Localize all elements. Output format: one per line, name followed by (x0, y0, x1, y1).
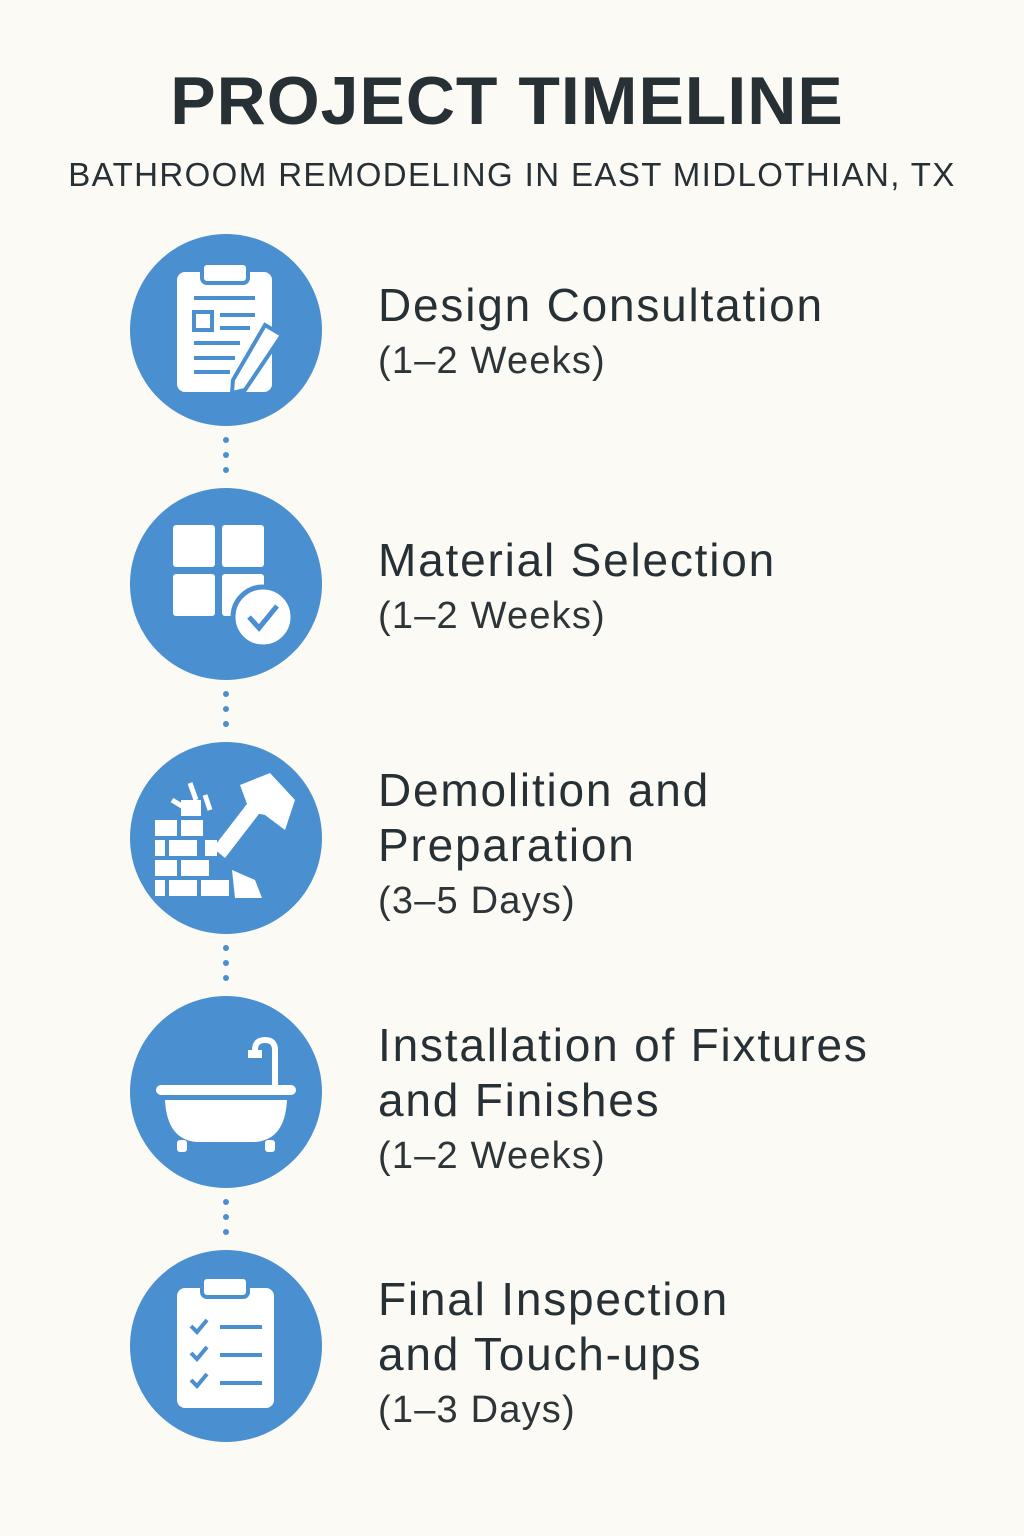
step 5 text (378, 1273, 729, 1431)
icon: checklist (130, 1250, 322, 1442)
step 2 text (378, 534, 776, 637)
icon: bathtub (130, 996, 322, 1188)
connectors (223, 437, 229, 1235)
step 4 text: Installation of Fixtures (378, 1019, 869, 1071)
icon: hammer and bricks (130, 742, 322, 934)
title: PROJECT TIMELINE (170, 63, 844, 139)
step 5 text: and Touch-ups (378, 1328, 702, 1380)
icon: clipboard with pencil (130, 234, 322, 426)
step 2 text: Material Selection (378, 534, 776, 586)
step 4 text: and Finishes (378, 1074, 660, 1126)
step 3 text: (3–5 Days) (378, 880, 576, 922)
subtitle: BATHROOM REMODELING IN EAST MIDLOTHIAN, TX (68, 156, 956, 193)
icon: tiles with check (130, 488, 322, 680)
step 1 text: (1–2 Weeks) (378, 340, 606, 382)
step 3 text (378, 764, 710, 922)
step 5 text: Final Inspection (378, 1273, 729, 1325)
step 2 text: (1–2 Weeks) (378, 595, 606, 637)
step 3 text: Preparation (378, 819, 636, 871)
step 4 text: (1–2 Weeks) (378, 1135, 606, 1177)
step 4 text (378, 1019, 869, 1177)
step 5 text: (1–3 Days) (378, 1389, 576, 1431)
step 1 text (378, 279, 824, 382)
step 1 text: Design Consultation (378, 279, 824, 331)
step 3 text: Demolition and (378, 764, 710, 816)
